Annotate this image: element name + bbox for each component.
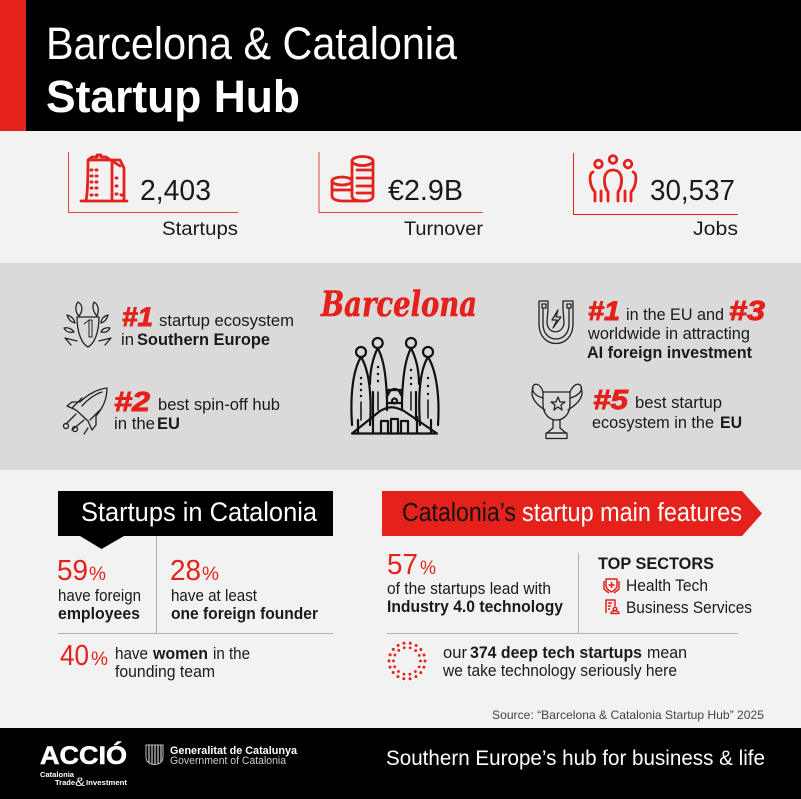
header banner	[0, 0, 801, 131]
stat: turnover	[319, 152, 484, 240]
footer band	[0, 728, 801, 799]
source note: Source: “Barcelona & Catalonia Startup Hub” 2025	[492, 708, 764, 722]
rank: #1 and #3 AI investment: #1	[588, 296, 620, 326]
text: deep tech startups: we take technology seriously here	[442, 662, 677, 680]
stat: jobs: 30,537	[650, 175, 735, 207]
heading: Catalonia's startup main features: startup main features	[522, 499, 742, 527]
logo: ACCIÓ: Trade	[55, 780, 75, 787]
stat: 59%: %	[89, 564, 106, 585]
stat: 40%: 40	[60, 640, 89, 672]
logo: Generalitat text	[170, 745, 298, 767]
logo: ACCIÓ: &	[75, 775, 85, 789]
stat: jobs: Jobs	[693, 218, 738, 240]
logo: ACCIÓ: ACCIÓ	[40, 740, 127, 770]
stat: 57%: of the startups lead with	[387, 580, 551, 598]
panel: Barcelona rankings	[0, 263, 801, 470]
top sectors list: Health Tech	[626, 576, 708, 595]
rank: #1 and #3 AI investment: AI foreign investment	[587, 344, 752, 362]
rank: #5 startup ecosystem	[532, 384, 742, 438]
rank: #1 and #3 AI investment: worldwide in attracting	[587, 325, 750, 343]
rank: #1 Southern Europe: Southern Europe	[137, 331, 270, 349]
stat: jobs	[574, 153, 738, 240]
top sectors list: Business Services	[626, 598, 752, 617]
text: deep tech startups: our	[443, 644, 467, 662]
logo: Generalitat text: Generalitat de Catalunya	[170, 745, 298, 757]
stat: startups: Startups	[162, 218, 238, 240]
stat: 57%: 57	[387, 549, 418, 581]
stat: 59%: employees	[58, 605, 140, 623]
stat: startups: 2,403	[140, 175, 211, 207]
stat: 57%: Industry 4.0 technology	[387, 598, 564, 616]
icon: rocket	[64, 388, 107, 434]
icon: laurel shield	[64, 302, 111, 347]
panel: Startups in Catalonia	[57, 491, 333, 681]
stat: 59%: have foreign	[58, 587, 141, 605]
stat: 59%: 59	[57, 555, 88, 587]
tagline: Southern Europe’s hub for business & life	[386, 746, 765, 770]
icon: health tech	[604, 579, 619, 593]
rank: #1 Southern Europe: startup ecosystem	[159, 312, 294, 330]
rank: #5 startup ecosystem: EU	[720, 414, 742, 432]
stat: 40%: have	[115, 645, 148, 663]
rank: #5 startup ecosystem: ecosystem in the	[592, 414, 714, 432]
rank: #1 Southern Europe	[64, 302, 294, 349]
rank: #1 and #3 AI investment	[539, 295, 765, 362]
icon: trophy	[532, 384, 582, 438]
rank: #2 spin-off hub: #2	[114, 386, 150, 417]
stat: 40%: %	[91, 649, 108, 670]
stat: turnover: €2.9B	[388, 175, 463, 207]
stat: 28%: %	[202, 564, 219, 585]
icon: coins	[332, 156, 373, 201]
rank: #2 spin-off hub: EU	[157, 415, 180, 433]
rank: #5 startup ecosystem: best startup	[635, 394, 722, 412]
stat: 57%	[387, 549, 564, 616]
logo: Generalitat text: Government of Catalonia	[170, 755, 287, 767]
stat: startups	[68, 152, 238, 240]
logo: Barcelona lettering: Barcelona	[320, 284, 477, 325]
text: deep tech startups: mean	[647, 644, 687, 662]
panel: startup main features	[382, 491, 762, 680]
logo: Generalitat shield	[146, 745, 163, 764]
logo: ACCIÓ	[40, 740, 128, 789]
rank: #1 and #3 AI investment: #3	[729, 295, 765, 326]
rank: #2 spin-off hub: in the	[114, 415, 155, 433]
rank: #5 startup ecosystem: #5	[593, 384, 628, 415]
icon: building	[81, 155, 127, 201]
title: Barcelona & Catalonia	[46, 18, 458, 69]
rank: #1 Southern Europe: #1	[122, 302, 153, 332]
rank: #2 spin-off hub: best spin-off hub	[158, 396, 280, 414]
stat: 59%	[57, 555, 141, 623]
icon: Sagrada Familia	[351, 338, 439, 434]
stat: 40%: founding team	[115, 663, 215, 681]
heading: Catalonia's startup main features	[382, 491, 762, 536]
heading: Startups in Catalonia: Startups in Catalonia	[81, 497, 317, 527]
stat: 40%: women	[152, 645, 208, 663]
text: deep tech startups: 374 deep tech startups	[470, 644, 642, 662]
stat: 28%: have at least	[171, 587, 257, 605]
icon: dotted ring	[389, 643, 425, 679]
icon: business services	[606, 600, 619, 614]
title: Startup Hub	[46, 71, 300, 122]
icon: people	[590, 156, 636, 201]
heading: Startups in Catalonia	[58, 491, 333, 549]
stat: 40%	[60, 640, 250, 681]
top sectors list	[598, 554, 752, 617]
text: deep tech startups	[442, 644, 687, 680]
rank: #2 spin-off hub	[64, 386, 280, 434]
stat: 28%	[170, 555, 319, 623]
heading: Catalonia's startup main features: Catalonia’s	[402, 499, 516, 527]
top sectors list: TOP SECTORS	[598, 554, 714, 573]
stat: 28%: 28	[170, 555, 201, 587]
logo: ACCIÓ: Investment	[86, 780, 128, 787]
logo: ACCIÓ: Catalonia	[40, 772, 74, 779]
title	[46, 18, 458, 122]
stat: 57%: %	[420, 558, 436, 579]
stat: turnover: Turnover	[404, 218, 484, 240]
stat: 28%: one foreign founder	[171, 605, 319, 623]
stat: 40%: in the	[213, 645, 250, 663]
rank: #1 Southern Europe: in	[121, 331, 134, 349]
icon: magnet	[539, 301, 573, 344]
rank: #1 and #3 AI investment: in the EU and	[626, 306, 724, 324]
